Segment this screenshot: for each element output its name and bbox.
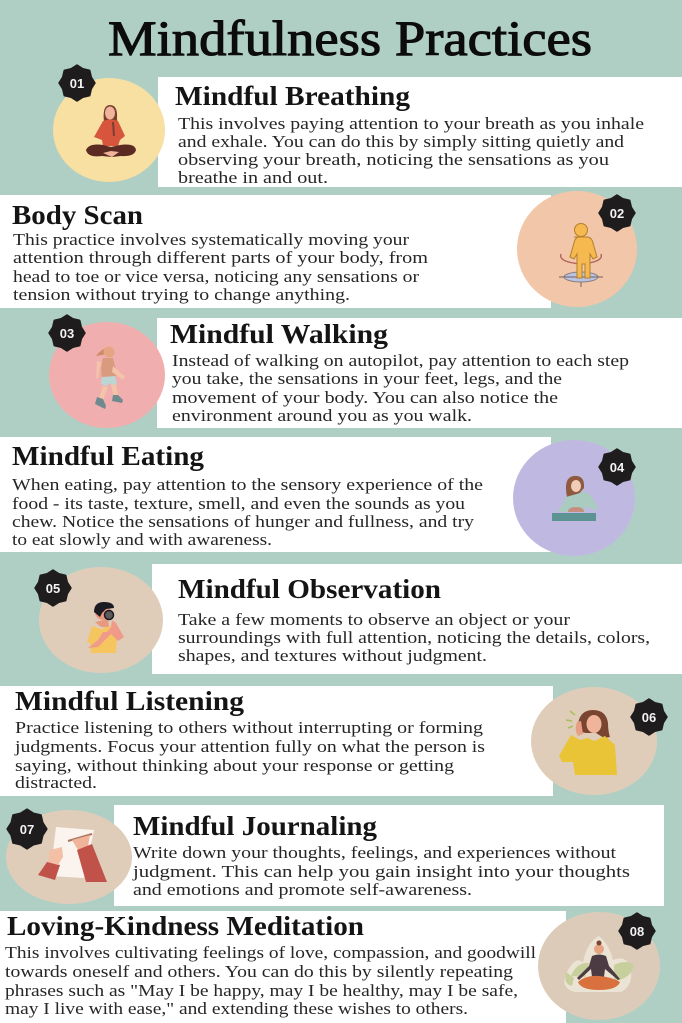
body text: Instead of walking on autopilot, pay attention to each step [172,351,629,370]
body text: you take, the sensations in your feet, legs, and the [172,369,562,388]
card background [114,805,664,906]
badge 04: 04 [610,460,625,475]
body text: attention through different parts of your body, from [13,248,428,267]
body text: distracted. [15,773,97,792]
badge 03 [49,315,85,351]
body text: observing your breath, noticing the sensations as you [178,150,610,169]
body text: and exhale. You can do this by simply sitting quietly and [178,132,625,151]
body text [178,610,650,665]
badge 02: 02 [610,206,624,221]
icon: meditating woman on yellow circle [53,78,165,182]
panel: mindful breathing [53,65,682,187]
icon: hands writing on paper on beige circle [6,810,132,904]
body text: saying, without thinking about your response or getting [15,756,455,775]
body text: head to toe or vice versa, noticing any sensations or [13,267,419,286]
body text: Take a few moments to observe an object or your [178,610,570,629]
body text: This practice involves systematically moving your [13,230,409,249]
panel: mindful listening [0,686,667,796]
card background [0,911,566,1023]
heading: Body Scan [12,200,143,230]
heading: Loving-Kindness Meditation [7,911,364,941]
body text: chew. Notice the sensations of hunger and fullness, and try [12,512,475,531]
body text: food - its taste, texture, smell, and even the sounds as you [12,494,466,513]
body text: towards oneself and others. You can do this by silently repeating [5,962,514,981]
card background [0,437,551,552]
body text: judgment. This can help you gain insight into your thoughts [132,862,630,881]
badge 05 [35,570,71,606]
heading: Mindful Observation [178,574,441,604]
icon: standing figure with scan ring on peach circle [517,191,637,307]
body text: and emotions and promote self-awareness. [133,880,472,899]
title: Mindfulness Practices [108,10,592,66]
heading: Mindful Journaling [133,811,378,841]
body text [172,351,629,425]
badge 06 [631,699,667,735]
body text: This involves paying attention to your breath as you inhale [178,114,644,133]
panel: body scan [0,191,637,308]
body text: Write down your thoughts, feelings, and experiences without [133,843,616,862]
heading: Mindful Walking [170,319,389,349]
body text [5,943,536,1018]
icon: meditating person with leaves on beige circle [538,912,660,1020]
body text: movement of your body. You can also notice the [172,388,558,407]
body text [12,475,483,549]
body text: tension without trying to change anything. [13,285,350,304]
card background [152,564,682,674]
panel: mindful observation [35,564,682,674]
card background [157,318,682,428]
body text: Practice listening to others without interrupting or forming [15,718,484,737]
body text: phrases such as "May I be happy, may I be healthy, may I be safe, [5,981,518,1000]
icon: boy with magnifier on beige circle [39,567,163,673]
body text [178,114,644,187]
icon: woman eating on lavender circle [513,440,635,556]
body text: environment around you as you walk. [172,406,472,425]
panel: mindful eating [0,437,635,556]
card background [158,77,682,187]
body text [132,843,630,899]
panel: loving-kindness meditation [0,911,660,1023]
badge 02 [599,195,635,231]
badge 07: 07 [20,822,34,837]
body text: When eating, pay attention to the sensory experience of the [12,475,483,494]
icon: walking girl on pink circle [49,322,165,428]
heading: Mindful Eating [12,441,205,471]
heading: Mindful Breathing [175,81,411,111]
card background [0,195,551,308]
badge 07 [7,809,47,849]
badge 08 [619,913,655,949]
badge 04 [599,449,635,485]
body text: surroundings with full attention, noticing the details, colors, [178,628,650,647]
icon: woman listening on beige circle [531,687,657,795]
badge 01: 01 [70,76,84,91]
body text [14,718,485,792]
body text: judgments. Focus your attention fully on what the person is [14,737,485,756]
body text [13,230,428,304]
body text: may I live with ease," and extending these wishes to others. [5,999,468,1018]
badge 03: 03 [60,326,74,341]
badge 05: 05 [46,581,60,596]
badge 08: 08 [630,924,644,939]
heading: Mindful Listening [15,686,245,716]
panel: mindful journaling [6,805,664,906]
card background [0,686,553,796]
body text: This involves cultivating feelings of love, compassion, and goodwill [5,943,536,962]
badge 01 [59,65,95,101]
body text: shapes, and textures without judgment. [178,646,487,665]
body text: breathe in and out. [178,168,328,187]
body text: to eat slowly and with awareness. [12,530,272,549]
panel: mindful walking [49,315,682,428]
badge 06: 06 [642,710,656,725]
